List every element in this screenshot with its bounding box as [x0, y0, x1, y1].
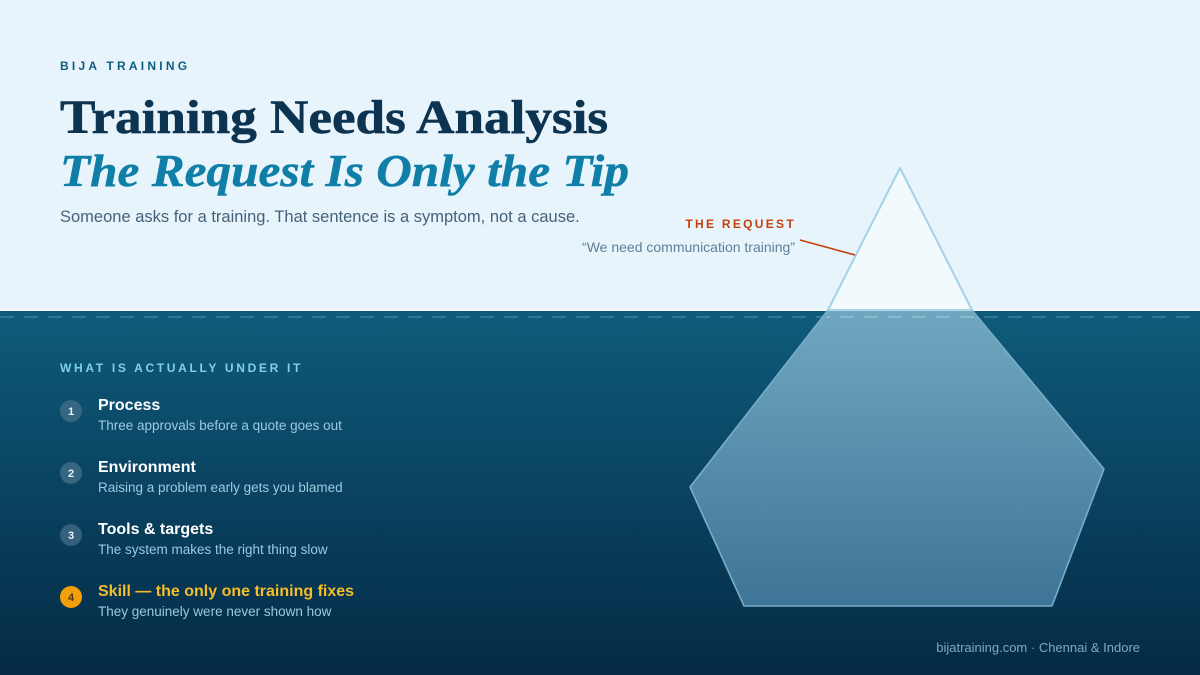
list item 4: 4: [68, 592, 75, 604]
list item 4: Skill — the only one training fixes: [98, 583, 354, 600]
list item 3: 3: [68, 530, 74, 542]
list item 1: Three approvals before a quote goes out: [98, 418, 342, 433]
list item 3: The system makes the right thing slow: [98, 542, 328, 557]
section heading: WHAT IS ACTUALLY UNDER IT: [60, 361, 303, 375]
list item 1: Process: [98, 397, 160, 414]
iceberg underwater mass: [690, 310, 1104, 606]
footer: bijatraining.com · Chennai & Indore: [936, 640, 1140, 655]
iceberg tip: [828, 168, 972, 310]
list item 2: [60, 459, 343, 495]
list item 4: [60, 583, 354, 619]
list item 3: Tools & targets: [98, 521, 213, 538]
list item 1: 1: [68, 406, 74, 418]
list item 1: [60, 397, 342, 433]
callout label: THE REQUEST: [685, 217, 796, 231]
callout: the request: [582, 217, 855, 255]
iceberg: [690, 168, 1104, 606]
title: Training Needs Analysis: [60, 91, 608, 144]
list item 3: [60, 521, 328, 557]
list item 4: They genuinely were never shown how: [98, 604, 332, 619]
subtitle: The Request Is Only the Tip: [60, 145, 629, 196]
brand label: BIJA TRAINING: [60, 59, 190, 73]
callout quote: “We need communication training”: [582, 239, 795, 255]
list item 2: Raising a problem early gets you blamed: [98, 480, 343, 495]
water background: [0, 311, 1200, 675]
sky background: [0, 0, 1200, 311]
callout leader line: [800, 240, 855, 255]
list item 2: Environment: [98, 459, 196, 476]
intro sentence: Someone asks for a training. That sentence is a symptom, not a cause.: [60, 208, 580, 226]
list item 2: 2: [68, 468, 74, 480]
